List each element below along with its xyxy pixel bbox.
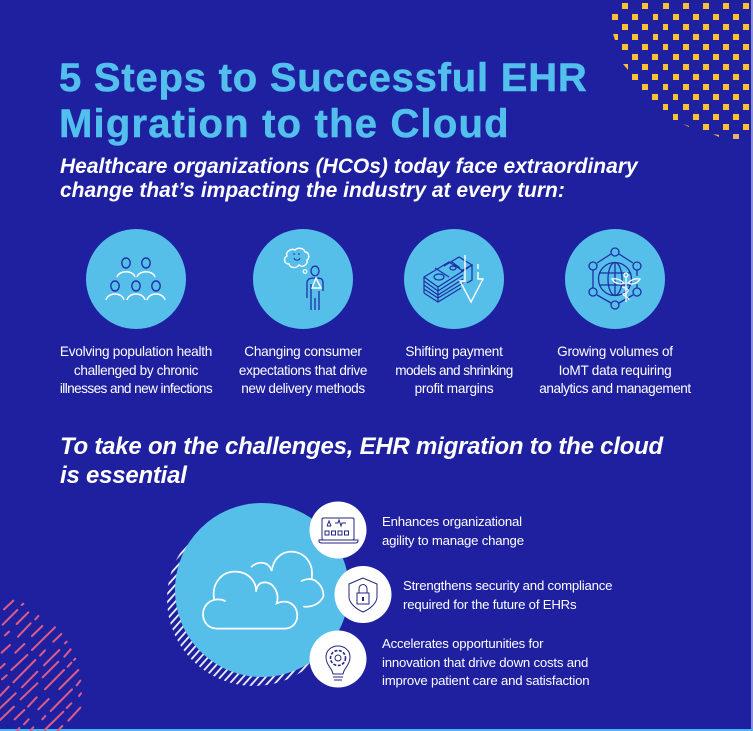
illustration: large cloud circle (175, 503, 349, 677)
caption: IoMT data (539, 344, 692, 396)
benefit: innovation (382, 636, 589, 688)
icon: population group (86, 229, 186, 329)
subtitle: Healthcare organizations (HCOs) today face extraordinary (60, 155, 638, 178)
caption: IoMT data: IoMT data requiring (559, 362, 671, 378)
caption: payment models: models and shrinking (395, 362, 513, 378)
benefit: agility (382, 514, 524, 548)
caption: IoMT data: Growing volumes of (557, 344, 673, 359)
caption: consumer expectations: Changing consumer (244, 344, 362, 359)
caption: population health: Evolving population health (60, 344, 212, 359)
icon: consumer with thought cloud (253, 229, 353, 329)
decoration: pink dashed lines (0, 601, 81, 731)
section heading (60, 433, 664, 489)
benefit: innovation: innovation that drive down costs and (382, 654, 588, 670)
caption: payment models: Shifting payment (405, 344, 503, 359)
icon: money with down arrows (404, 229, 504, 329)
caption: consumer expectations: expectations that drive (239, 362, 367, 378)
section heading: is essential (60, 462, 187, 489)
benefit: agility: agility to manage change (382, 532, 524, 548)
decoration: yellow dot pattern (612, 3, 749, 139)
caption: IoMT data: analytics and management (539, 381, 691, 396)
benefit: security: required for the future of EHRs (403, 596, 576, 612)
title: 5 Steps to Successful EHR (59, 56, 588, 100)
icon: security shield (334, 566, 392, 623)
caption: population health: illnesses and new infections (60, 381, 212, 396)
benefit: innovation: Accelerates opportunities for (382, 636, 543, 651)
icon: IoMT globe with caduceus (565, 229, 665, 329)
benefit: innovation: improve patient care and satisfaction (382, 673, 589, 688)
subtitle (60, 155, 638, 202)
caption: population health (60, 344, 212, 396)
icon: lightbulb gear (310, 630, 366, 688)
caption: consumer expectations: new delivery methods (241, 381, 365, 396)
benefit: security (403, 578, 612, 612)
title: Migration to the Cloud (59, 102, 510, 146)
icon: laptop dashboard (310, 502, 366, 558)
caption: population health: challenged by chronic (74, 362, 198, 378)
benefit: agility: Enhances organizational (382, 514, 522, 529)
caption: consumer expectations (239, 344, 367, 396)
subtitle: change that’s impacting the industry at every turn: (60, 179, 565, 202)
benefit: security: Strengthens security and compliance (403, 578, 612, 593)
caption: payment models: profit margins (415, 381, 493, 396)
title (59, 56, 588, 146)
caption: payment models (395, 344, 513, 396)
illustration: hatched circle shadow (167, 512, 341, 686)
section heading: To take on the challenges, EHR migration to the cloud (60, 433, 663, 460)
